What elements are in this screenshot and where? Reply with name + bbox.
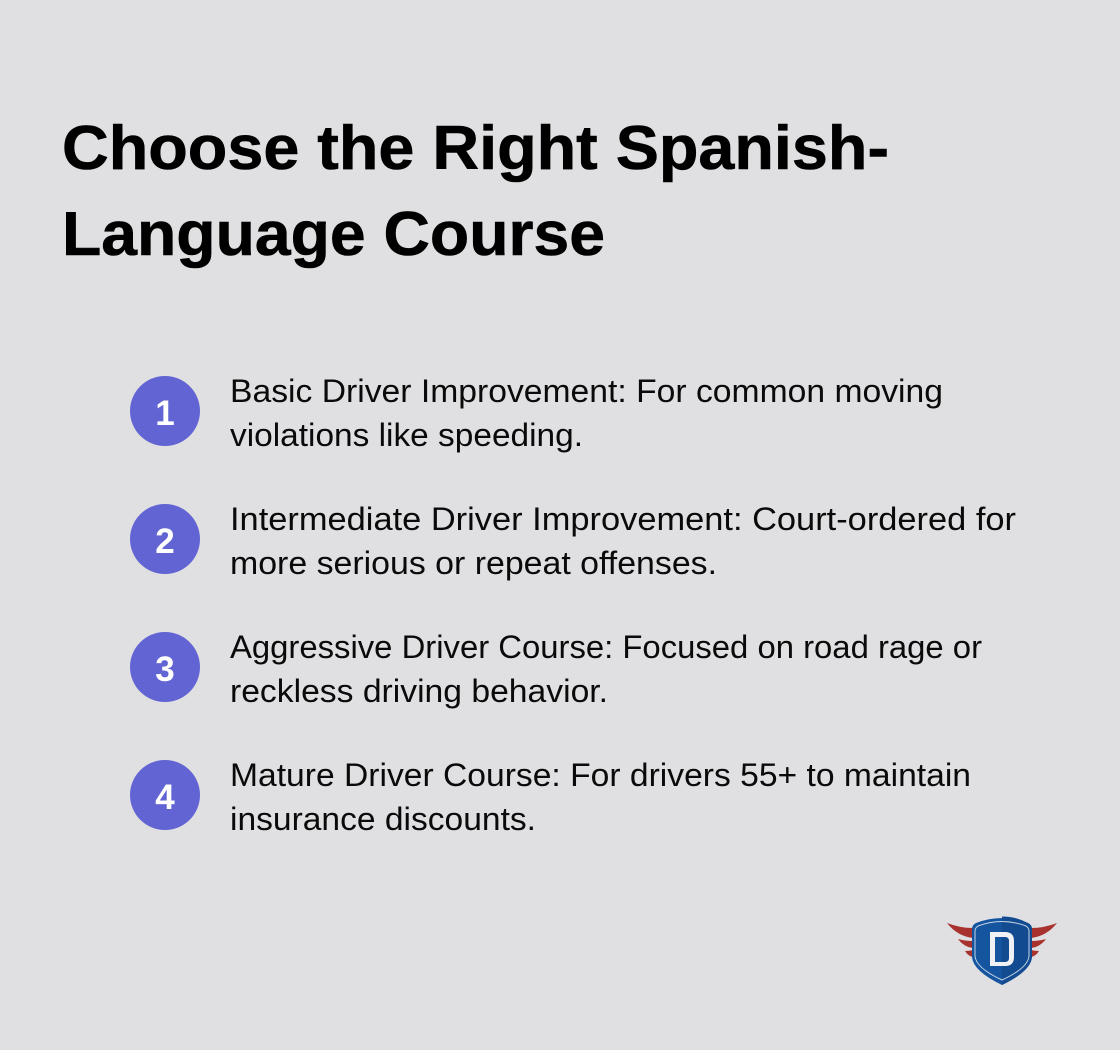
item 4 text: Mature Driver Course: For drivers 55+ to maintain — [230, 757, 971, 793]
left wings — [947, 923, 973, 957]
item 4 text: insurance discounts. — [230, 801, 536, 837]
number badge 2 — [130, 504, 200, 574]
item 2 text: Intermediate Driver Improvement: Court-ordered for — [230, 501, 1016, 537]
list item 3 — [130, 629, 982, 709]
title: Language Course — [62, 200, 605, 269]
number badge 1 — [130, 376, 200, 446]
item 1 text — [230, 373, 943, 453]
number badge 3 — [130, 632, 200, 702]
item 2 text — [230, 501, 1016, 581]
title: Choose the Right Spanish- — [62, 114, 889, 183]
letter D — [990, 932, 1014, 966]
number badge 4: 4 — [155, 778, 175, 817]
item 3 text: reckless driving behavior. — [230, 673, 608, 709]
number badge 1: 1 — [155, 394, 175, 433]
number badge 4 — [130, 760, 200, 830]
right wings — [1031, 923, 1057, 957]
number badge 2: 2 — [155, 522, 175, 561]
list item 4 — [130, 757, 971, 837]
title — [62, 114, 889, 269]
item 4 text — [230, 757, 971, 837]
icon: winged shield logo — [947, 916, 1057, 985]
number badge 3: 3 — [155, 650, 175, 689]
shield — [972, 918, 1032, 985]
item 1 text: Basic Driver Improvement: For common moving — [230, 373, 943, 409]
item 1 text: violations like speeding. — [230, 417, 583, 453]
list item 2 — [130, 501, 1016, 581]
item 2 text: more serious or repeat offenses. — [230, 545, 717, 581]
item 3 text: Aggressive Driver Course: Focused on road rage or — [230, 629, 982, 665]
list item 1 — [130, 373, 943, 453]
item 3 text — [230, 629, 982, 709]
